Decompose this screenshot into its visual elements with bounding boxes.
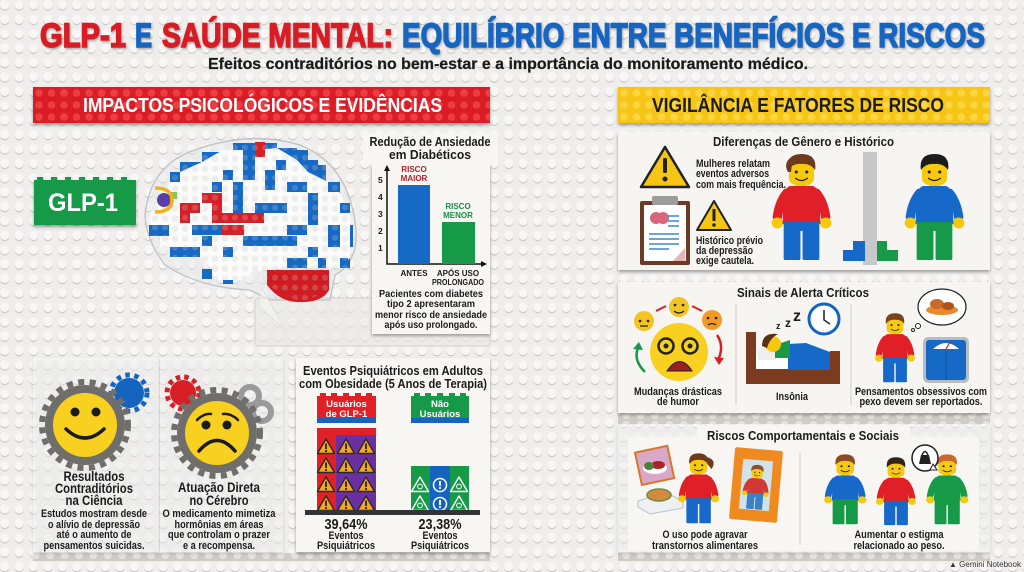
figure: red person [876,457,916,525]
section header: vigilancia [618,87,990,123]
panel: resultados contraditorios [33,358,159,552]
bar chart: PROLONGADO [432,278,484,287]
figure: blue person [824,454,866,524]
GLP-1 brick: GLP-1 [48,189,118,217]
bar chart: MAIOR [401,174,428,183]
body [162,508,276,552]
chart note [375,288,487,331]
panel: riscos comportamentais [618,425,990,552]
credit: ▲ Gemini Notebook [949,560,1022,569]
stud texture [150,143,350,302]
body: até o aumento de [56,529,132,541]
chart title: em Diabéticos [389,148,471,162]
text: mulheres: eventos adversos [696,168,769,180]
value: nao usuarios: Eventos [422,530,458,542]
icon: speech bubble weight [912,445,938,471]
transparent shell [145,139,356,300]
chart note: menor risco de ansiedade [375,309,487,321]
value: usuarios [317,516,375,552]
figure: thinking [875,313,915,382]
heading: Resultados [64,469,124,484]
heading: Contraditórios [55,481,133,496]
text: mulheres [696,158,786,191]
section header: impactos: IMPACTOS PSICOLÓGICOS E EVIDÊNCIAS [83,93,442,117]
band under lower panels [33,553,490,561]
heading: com Obesidade (5 Anos de Terapia) [299,376,487,391]
value: nao usuarios [411,516,469,552]
text: historico: Histórico prévio [696,235,763,247]
bar chart: 1 [378,243,383,253]
subtitle: Efeitos contraditórios no bem-estar e a importância do monitoramento médico. [208,56,808,73]
heading: Sinais de Alerta Críticos [737,285,869,300]
icon: mood swings [633,297,724,381]
icon: zzz: z [793,308,801,325]
icon: scale [923,337,969,383]
panel: sinais de alerta [618,282,990,413]
text: alimentares [652,529,758,552]
icon: plate [638,489,683,514]
figure: man [905,154,964,260]
text: humor: de humor [657,396,700,408]
figure: woman [772,154,831,260]
figure: green person [926,454,968,524]
text: historico [696,235,763,267]
bar chart: APÓS USO [437,269,479,278]
bar chart: 2 [378,226,383,236]
blue underlay along the top edge [170,143,350,268]
wall [843,152,898,265]
text: estigma [854,529,944,552]
heading: Riscos Comportamentais e Sociais [707,428,899,443]
icon: clock [809,304,839,334]
accent marker [155,188,177,212]
bar chart: 3 [378,209,383,219]
value: nao usuarios: 23,38% [418,516,462,533]
bar chart: 4 [378,192,383,202]
icon: thought bubble food [912,289,966,332]
text: humor [634,386,722,408]
icon: zzz: z [776,321,781,331]
brick label: nao usuarios: Não [431,399,449,410]
text: historico: exige cautela. [696,255,754,267]
chart note: Pacientes com diabetes [379,288,483,300]
bar chart: RISCO [401,165,427,174]
text: insonia: Insônia [776,391,809,403]
icon: clipboard [640,196,690,265]
icon: warning large [641,147,689,187]
body: Estudos mostram desde [41,508,147,520]
heading [55,469,133,508]
bar chart: 5 [378,175,383,185]
text: historico: da depressão [696,245,753,257]
brain stem [258,288,285,330]
panel: atuacao direta [160,358,283,552]
icon: bed [746,332,840,384]
body: o alívio de depressão [48,519,140,531]
brain of bricks [145,139,490,346]
brick label: nao usuarios: Usuários [420,409,460,420]
chart title: Redução de Ansiedade [370,135,491,149]
chart note: tipo 2 apresentaram [387,298,475,310]
text: alimentares: transtornos alimentares [652,540,758,552]
bar chart [378,165,487,287]
text: pensamentos [855,386,987,408]
text: humor: Mudanças drásticas [634,386,722,398]
cerebellum [267,270,329,302]
value: usuarios: Eventos [328,530,364,542]
figure: woman with food [678,453,719,523]
chart title [370,135,491,162]
heading: na Ciência [66,493,123,508]
icon: mirror [729,447,783,523]
bar chart: ANTES [400,269,428,278]
icon: food picture [635,446,674,485]
body [41,508,147,552]
body: e a recompensa. [183,540,255,552]
transparent stand [255,298,490,346]
text: estigma: Aumentar o estigma [854,529,944,541]
chart note: após uso prolongado. [384,319,478,331]
brick label: nao usuarios [411,393,469,423]
red bricks [180,142,265,235]
text: pensamentos: pexo devem ser reportados. [860,396,982,408]
text: alimentares: O uso pode agravar [662,529,748,541]
heading: Eventos Psiquiátricos em Adultos [303,363,483,378]
icon: gears with happy face [42,375,147,468]
blue bricks [149,150,353,284]
heading [178,480,260,508]
value: nao usuarios: Psiquiátricos [411,540,469,552]
panel: diferencas de genero [618,132,990,270]
text: estigma: relacionado ao peso. [854,540,944,552]
bar chart: MENOR [443,211,473,220]
brick label: usuarios: de GLP-1 [326,409,368,420]
icon: gears with sad face [167,377,271,476]
title: GLP-1 [40,17,126,55]
heading: no Cérebro [190,493,248,508]
stack: usuarios [317,428,376,510]
section header: vigilancia: VIGILÂNCIA E FATORES DE RISCO [652,93,944,117]
title [40,17,985,55]
body: O medicamento mimetiza [162,508,276,520]
heading: Diferenças de Gênero e Histórico [713,134,894,149]
panel: eventos psiquiatricos [296,358,490,552]
heading [299,363,487,391]
value: usuarios: Psiquiátricos [317,540,375,552]
value: usuarios: 39,64% [324,516,368,533]
body: pensamentos suicidas. [44,540,144,552]
text: pensamentos: Pensamentos obsessivos com [855,386,987,398]
brick label: usuarios: Usuários [326,399,367,410]
brick label: usuarios [317,393,376,423]
heading: Atuação Direta [178,480,260,495]
icon: warning small [697,201,731,230]
stack: nao usuarios [411,466,469,510]
icon: zzz: z [785,316,791,330]
white bricks [150,148,350,280]
bar chart: RISCO [445,202,471,211]
text: mulheres: com mais frequência. [696,179,786,191]
title: SAÚDE MENTAL: [162,17,393,55]
title: E [135,17,152,55]
text: mulheres: Mulheres relatam [696,158,770,170]
body: que controlam o prazer [168,529,271,541]
section header: impactos [33,87,490,123]
band under right panels [618,414,990,424]
panel: chart de ansiedade [363,133,498,334]
GLP-1 brick [34,177,136,225]
body: hormônias em áreas [174,519,264,531]
icon: zzz [776,308,801,331]
